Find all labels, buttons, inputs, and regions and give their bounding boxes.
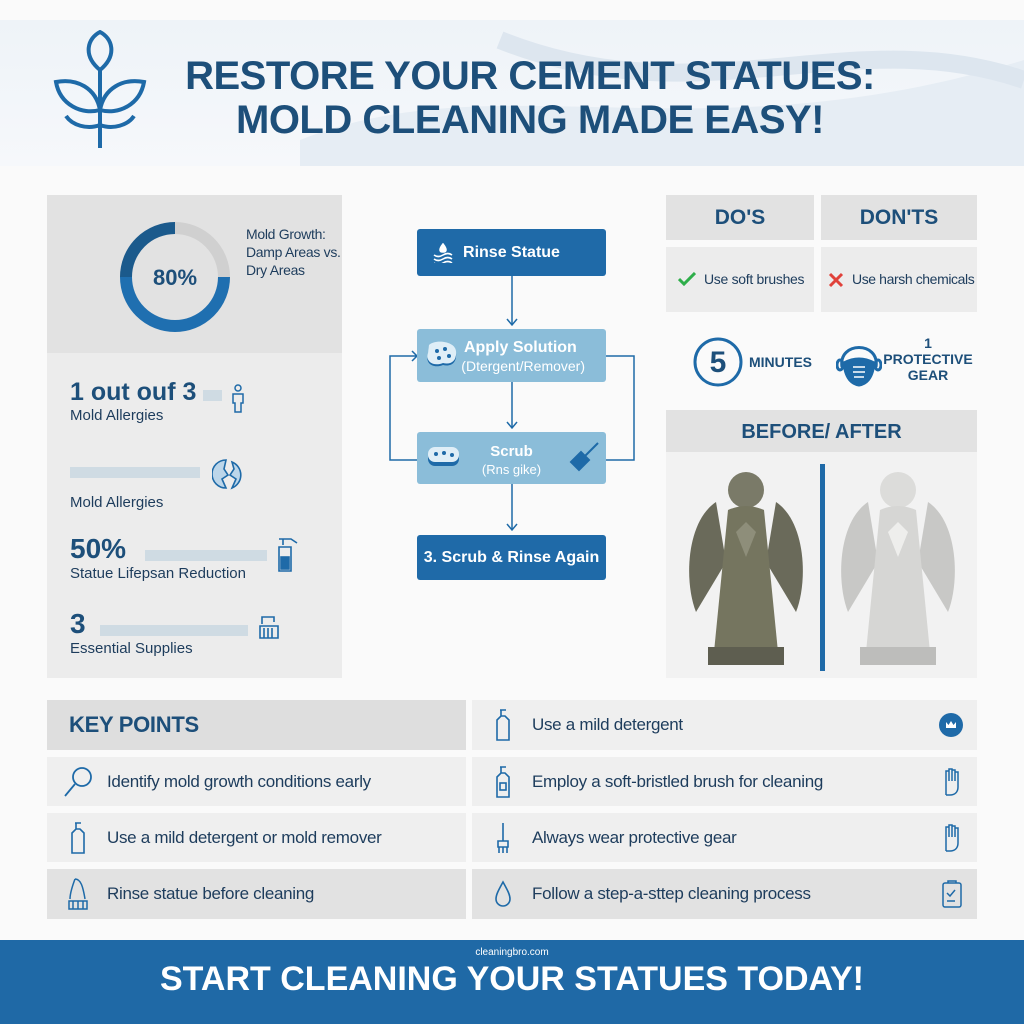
flow step 4: 3. Scrub & Rinse Again <box>424 549 599 566</box>
flow step 3: Scrub <box>490 443 533 460</box>
panel: key points: Use a mild detergent or mold remover <box>107 828 382 846</box>
website: cleaningbro.com <box>475 947 549 958</box>
call to action: START CLEANING YOUR STATUES TODAY! <box>160 960 864 998</box>
stat: 1 out of 3: Mold Allergies <box>70 407 163 424</box>
flow step 1 <box>417 229 606 276</box>
footer banner <box>0 940 1024 1024</box>
panel: key points: Identify mold growth conditions early <box>107 772 371 790</box>
panel: do's and don'ts: Use harsh chemicals <box>852 271 974 287</box>
title: MOLD CLEANING MADE EASY! <box>236 98 824 142</box>
stat: 5 minutes <box>694 338 812 386</box>
donut chart <box>47 195 342 353</box>
stat: protective gear: GEAR <box>908 367 948 383</box>
donut chart: 80% <box>153 265 197 290</box>
panel: do's and don'ts: DO'S <box>715 206 765 229</box>
panel: key points <box>47 700 977 919</box>
stat: 50% <box>70 533 298 582</box>
panel: key points: Rinse statue before cleaning <box>107 884 314 903</box>
stat: mold allergies: Mold Allergies <box>70 494 163 511</box>
panel: key points: Follow a step-a-sttep cleaning process <box>532 884 811 903</box>
panel: do's and don'ts <box>666 195 977 312</box>
panel: key points: Always wear protective gear <box>532 828 736 846</box>
stat: 50%: 50% <box>70 533 126 564</box>
heading: key points: KEY POINTS <box>69 712 199 737</box>
image: before statue <box>689 472 803 665</box>
flow step 3: (Rns ɡike) <box>482 462 541 477</box>
panel: stats <box>47 195 342 678</box>
panel: before/after <box>666 410 977 678</box>
panel: do's and don'ts: DON'TS <box>860 206 938 229</box>
stat: 50%: Statue Lifepsan Reduction <box>70 565 246 582</box>
donut chart: Mold Growth: <box>246 226 326 242</box>
image: after statue <box>841 472 955 665</box>
stat: 1 out of 3 <box>70 378 244 424</box>
stat: protective gear <box>836 335 973 386</box>
title: RESTORE YOUR CEMENT STATUES: <box>185 54 875 98</box>
icon: leaf <box>54 30 146 148</box>
stat: 5 minutes: 5 <box>710 346 726 379</box>
stat: 1 out of 3: 1 out ouf 3 <box>70 378 196 406</box>
donut chart: Dry Areas <box>246 262 305 278</box>
stat: 5 minutes: MINUTES <box>749 354 812 370</box>
flow step 2: (Dtergent/Remover) <box>461 358 585 374</box>
title <box>185 54 875 142</box>
panel: key points: Employ a soft-bristled brush for cleaning <box>532 772 823 790</box>
stat: protective gear: 1 <box>924 335 932 351</box>
flow step 2: Apply Solution <box>464 339 577 356</box>
heading: key points <box>47 700 466 750</box>
header background <box>0 20 1024 166</box>
flow step 3 <box>417 432 606 484</box>
panel: do's and don'ts: Use soft brushes <box>704 271 804 287</box>
donut chart: Damp Areas vs. <box>246 244 341 260</box>
panel: before/after: BEFORE/ AFTER <box>741 421 902 443</box>
stat: mold allergies <box>70 459 242 511</box>
stat: 3 supplies <box>70 608 279 657</box>
panel: key points: Use a mild detergent <box>532 715 683 734</box>
flow step 1: Rinse Statue <box>463 244 560 261</box>
flow step 4 <box>417 535 606 580</box>
stat: protective gear: PROTECTIVE <box>883 351 973 367</box>
stat: 3 supplies: 3 <box>70 608 86 639</box>
stat: 3 supplies: Essential Supplies <box>70 640 193 657</box>
flowchart <box>389 276 635 531</box>
flow step 2 <box>417 329 606 382</box>
